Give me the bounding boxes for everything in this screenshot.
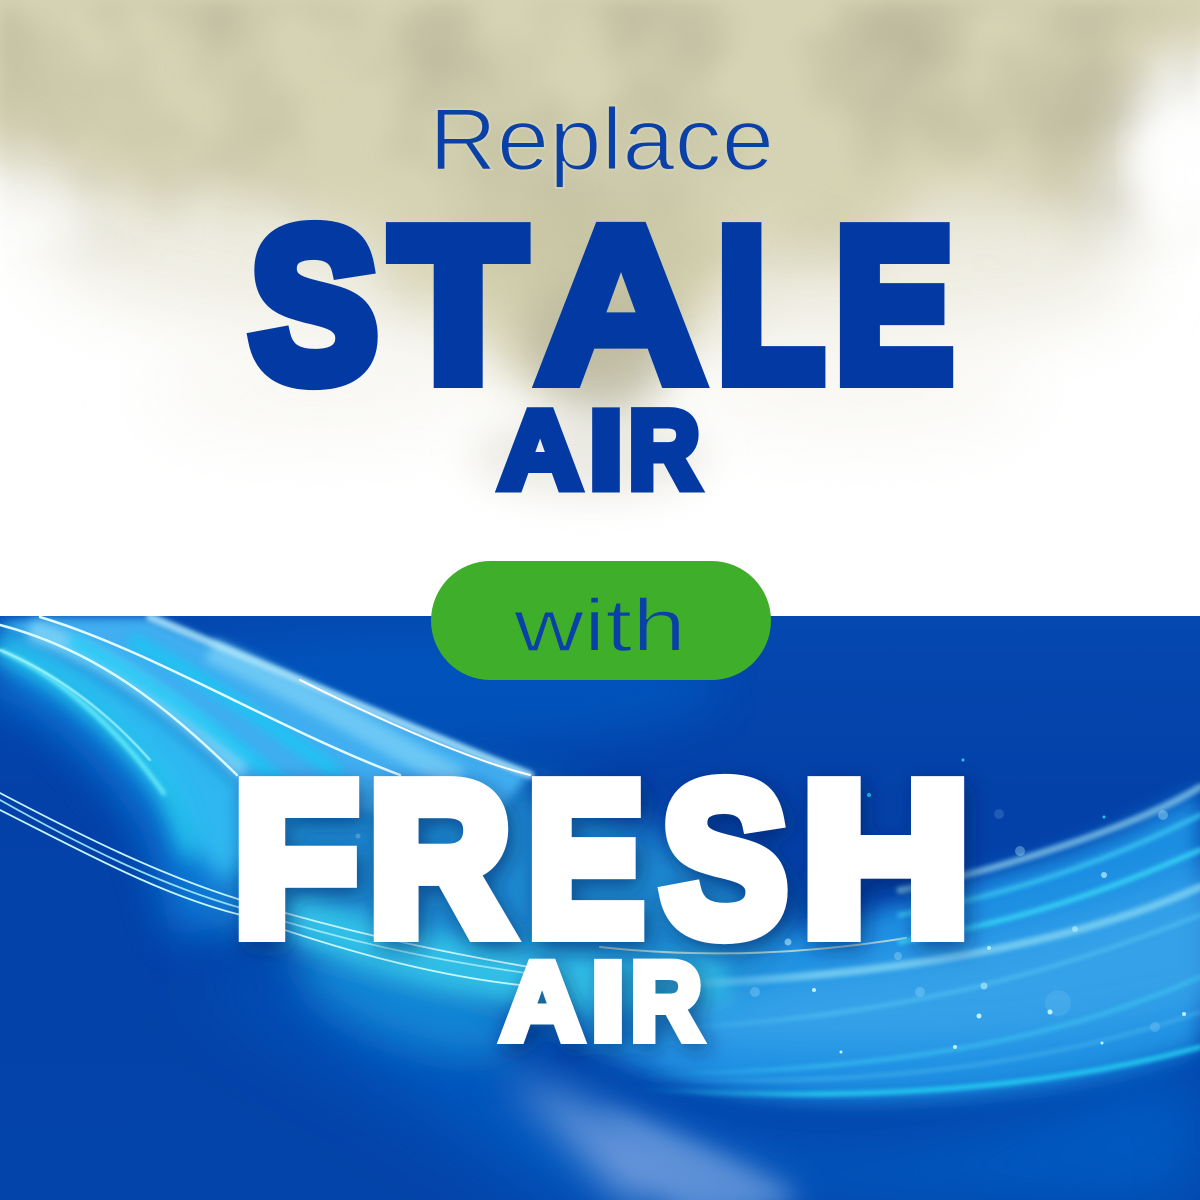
heading: FRESH: R: [369, 738, 511, 979]
glow: left of AIR: [282, 948, 534, 1076]
heading: FRESH: S: [662, 738, 787, 979]
glow: lower middle blue: [266, 983, 1200, 1200]
badge pill: [431, 561, 771, 680]
band: purple-blue ribbon at the bottom: [500, 1070, 800, 1200]
heading: AIR (fresh): A: [501, 941, 584, 1064]
heading: STALE: S: [251, 184, 377, 425]
ribbon: bright edge lines: [0, 617, 1200, 985]
heading: AIR (stale): I: [589, 389, 623, 512]
ribbon: blue falloff beside the fan: [0, 660, 205, 930]
heading: Replace: Replace: [429, 90, 774, 188]
heading: STALE: A: [535, 180, 707, 430]
strands: long thin lines crossing the panel: [0, 793, 529, 967]
heading: STALE: E: [836, 184, 953, 425]
heading: AIR (stale): A: [499, 389, 582, 512]
heading: FRESH: F: [234, 738, 358, 979]
strands: right lower streaks fading in from the centre: [600, 887, 1200, 1094]
background: fresh air blue panel: [0, 616, 1200, 1200]
heading: AIR (fresh): R: [630, 941, 702, 1064]
heading: FRESH: E: [528, 738, 644, 979]
decorative sparkles: [356, 758, 1186, 1054]
heading: STALE: L: [718, 184, 824, 425]
heading: AIR (stale): R: [628, 389, 700, 512]
band: centre glow behind FRESH: [200, 773, 800, 1014]
ribbon: fan of light from upper left: [0, 625, 300, 880]
background: stale air haze: [0, 0, 1200, 508]
heading: AIR (fresh): I: [591, 941, 625, 1064]
heading: STALE: T: [392, 184, 524, 425]
glow: upper blue lift: [252, 639, 702, 746]
badge text: with: [513, 584, 686, 667]
band: right light wave: [520, 790, 1200, 1100]
heading: FRESH: H: [802, 738, 970, 979]
badge: with: [431, 561, 771, 680]
